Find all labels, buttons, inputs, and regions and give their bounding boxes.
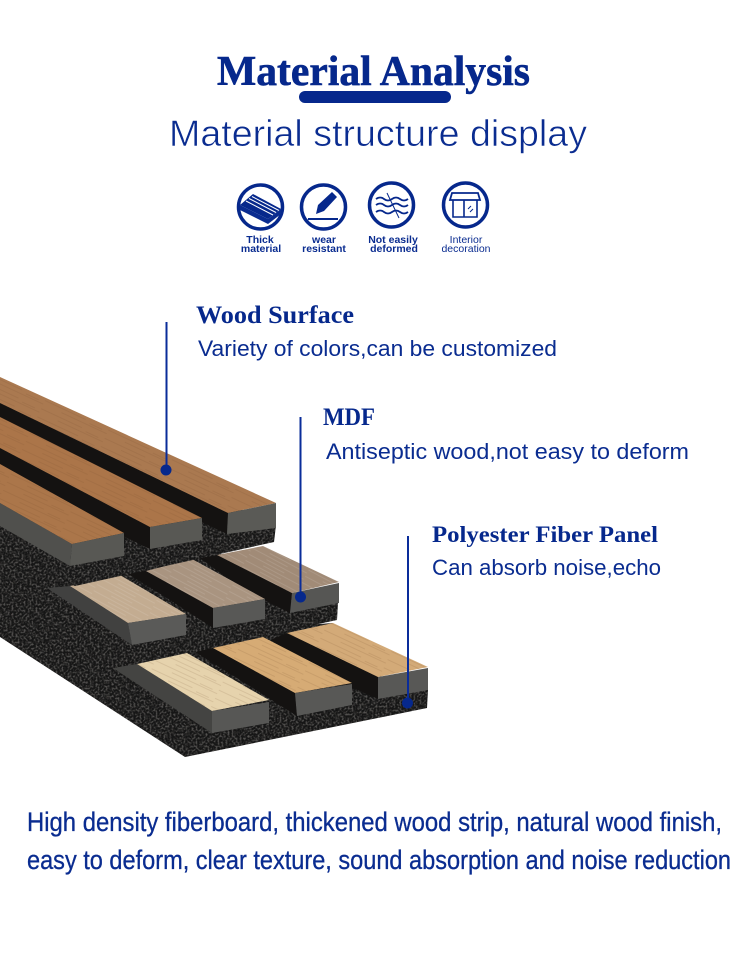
top tier: back strip [0,377,276,534]
subtitle: Material structure display [169,113,588,154]
title underline bar [299,91,451,103]
callout: wood surface: Variety of colors,can be customized [198,336,557,361]
icon: not easily deformed: deformed [370,243,418,255]
bottom tier: middle strip [195,637,352,716]
panel stack illustration [0,377,428,757]
icon: thick material: material [241,243,281,255]
callout: polyester fiber panel [402,522,661,708]
bottom tier: foam base [0,560,428,757]
icon: interior decoration [441,183,491,255]
icon: thick material: Thick [246,234,274,246]
callout: polyester fiber panel: Can absorb noise,echo [432,555,661,580]
top tier: foam [0,400,276,586]
icon: wear resistant: resistant [302,243,346,255]
middle tier: foam [0,480,338,668]
icon: thick material [238,185,282,255]
callout: polyester fiber panel: Polyester Fiber Panel [432,522,658,547]
middle tier: left strip [47,575,186,645]
callout: wood surface: Wood Surface [196,302,354,329]
feature icons row [238,183,491,255]
bottom tier: left strip [113,653,269,733]
bottom description [27,807,731,875]
icon: not easily deformed [368,183,418,255]
icon: not easily deformed: Not easily [368,234,418,246]
bottom tier: right strip [270,623,428,699]
callout: MDF: Antiseptic wood,not easy to deform [326,439,689,464]
callout: MDF: MDF [323,404,375,431]
icon: wear resistant: wear [311,234,336,246]
icon: wear resistant [302,185,346,255]
title: Material Analysis [217,49,530,95]
top tier: centre strip [0,417,202,549]
callout: wood surface [160,302,557,476]
icon: interior decoration: decoration [441,243,491,255]
icon: interior decoration: Interior [450,234,483,246]
top tier: front strip [0,464,124,566]
middle tier: right strip [200,546,339,613]
callout: MDF [295,404,689,602]
middle tier: centre strip [128,559,265,628]
